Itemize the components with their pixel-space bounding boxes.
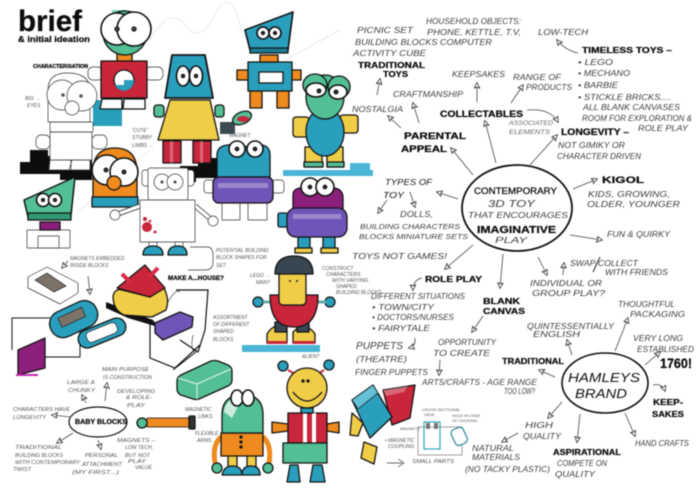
annotation: cute stubby limbs — [132, 128, 153, 149]
mind map: blank canvas: CANVAS — [483, 306, 525, 316]
mind map: timeless toys: ALL BLANK CANVASES — [582, 102, 680, 112]
mind map: blank canvas: ARTS/CRAFTS - AGE RANGE — [421, 377, 537, 387]
mind map: baby blocks: PLAY — [127, 403, 146, 409]
annotation: construct characters: CONSTRUCT — [322, 266, 354, 272]
toy: uncoloured outline character: CHARACTERISATION — [33, 64, 88, 70]
house building block sketch: ASSORTMENT — [212, 315, 249, 321]
mind map: baby blocks: BABY BLOCKS — [75, 417, 127, 426]
mind map: timeless toys: ROLE PLAY — [638, 123, 689, 133]
mind map: blank canvas: BLANK — [483, 296, 521, 306]
mind map: baby blocks: PLAY — [128, 459, 147, 465]
mind map: baby blocks: (MY FIRST...) — [72, 470, 120, 476]
mind map: individual or group play: INDIVIDUAL OR — [530, 278, 602, 288]
title: brief — [18, 5, 83, 38]
annotation: cute stubby limbs: 'CUTE' — [132, 128, 149, 134]
mind map: baby blocks: LONGEVITY — [13, 415, 47, 421]
annotation: lego man: LEGO → — [250, 273, 270, 279]
mind map: role play — [355, 274, 482, 377]
green building block — [177, 360, 232, 400]
magnetic link arm: LINKS — [198, 414, 213, 420]
mind map: types of toy: TOYS NOT GAMES! — [352, 251, 448, 261]
mind map: traditional and household toys: HOUSEHOLD OBJECTS: — [426, 16, 522, 26]
icon: magnet — [220, 108, 254, 139]
toy: orange dome character — [92, 148, 138, 207]
mind map: timeless toys: TIMELESS TOYS – — [582, 45, 672, 55]
mind map: baby blocks: BUT NOT — [125, 453, 151, 459]
mind map: timeless toys: • STICKLE BRICKS.... — [578, 92, 671, 102]
mind map: timeless toys: ROOM FOR EXPLORATION & — [582, 113, 692, 123]
toy: teal and purple robot — [204, 141, 284, 220]
mind map: hamleys brand: ESTABLISHED — [637, 344, 694, 354]
mind map: hamleys brand: (NO TACKY PLASTIC) — [465, 464, 550, 474]
mind map: collectables and parental appeal: ASSOCIATED — [508, 120, 553, 127]
toy: green droopy-eyed character — [293, 74, 358, 167]
mind map: baby blocks: DEVELOPING — [117, 389, 155, 395]
mind map: collectables and parental appeal — [352, 69, 572, 155]
mind map: traditional and household toys: TOYS — [383, 69, 408, 79]
mind map: timeless toys: • MECHANO — [578, 68, 630, 78]
mind map: baby blocks: CHUNKY — [68, 388, 96, 394]
mind map: hamleys brand: HIGH — [525, 420, 554, 430]
magnetic link arm: ARMS → — [196, 438, 218, 444]
mind map: collectables and parental appeal: RANGE OF — [513, 72, 562, 82]
mind map: hamleys brand: 1760! — [660, 355, 692, 371]
mind map: longevity and kigol — [557, 127, 680, 239]
toy: blue head yellow dress robot — [154, 55, 224, 163]
mind map: hamleys brand: ASPIRATIONAL — [553, 447, 621, 457]
mind map: collectables and parental appeal: COLLECTABLES — [440, 109, 523, 119]
mind map: timeless toys — [538, 27, 692, 133]
mind map: traditional and household toys: TRADITIONAL — [358, 60, 425, 70]
annotation: cute stubby limbs: STUBBY — [132, 135, 153, 141]
mind map: hamleys brand: THOUGHTFUL — [618, 299, 675, 309]
mind map: hamleys brand: SAKES — [652, 409, 684, 419]
mind map: baby blocks: BUILDING BLOCKS — [15, 453, 64, 459]
mind map: role play: DIFFERENT SITUATIONS — [371, 291, 465, 301]
mind map: hamleys brand: QUALITY — [555, 469, 596, 479]
house building block sketch: MAKE A...HOUSE? — [168, 275, 224, 282]
mind map: baby blocks: ATTACHMENT — [81, 462, 123, 468]
annotation: construct characters: BUILDING BLOCKS — [336, 290, 382, 296]
annotation: potential building block shapes — [188, 247, 269, 270]
mind map: baby blocks: MAGNETS – — [117, 438, 155, 444]
mind map: collectables and parental appeal: PRODUCTS — [526, 82, 572, 92]
mind map: hamleys brand: KEEP- — [653, 397, 683, 407]
annotation: construct characters: CHARACTERS — [326, 272, 361, 278]
mind map: hamleys brand: TRADITIONAL — [502, 356, 564, 366]
mind map: baby blocks: TRADITIONAL — [15, 445, 62, 451]
mind map: hamleys brand: PACKAGING — [630, 309, 685, 319]
mind map: baby blocks: WITH CONTEMPORARY — [15, 460, 81, 466]
magnetic link arm — [137, 407, 219, 444]
mind map: blank canvas — [421, 296, 537, 396]
diagram: cross-sectional view: VIEW — [424, 412, 435, 417]
background marker swatches — [20, 10, 373, 182]
mind map: baby blocks: LOW TECH, — [125, 445, 153, 451]
mind map: collectables and parental appeal: NOSTALGIA — [352, 104, 403, 114]
mind map: role play: • FAIRYTALE — [372, 323, 430, 333]
mind map: longevity and kigol: KIGOL — [602, 175, 644, 186]
mind map: collectables and parental appeal: ELEMENTS — [509, 129, 551, 136]
mind map: timeless toys: • BARBIE — [578, 80, 618, 90]
mind map: collectables and parental appeal: PARENTAL — [404, 131, 466, 142]
mind map: hamleys brand: ENGLISH — [533, 329, 581, 339]
diagram: cross-sectional view: OF CHOKING — [452, 418, 477, 423]
mind map: timeless toys: • LEGO — [578, 57, 613, 67]
annotation: lego man: MAN? — [256, 280, 270, 286]
mind map: longevity and kigol: NOT GIMIKY OR — [558, 140, 625, 150]
annotation: cute stubby limbs: LIMBS → — [132, 143, 153, 149]
mind map: baby blocks: VALUE — [135, 465, 153, 471]
mind map: role play: ROLE PLAY — [425, 274, 482, 284]
toy: green head red body robot — [88, 11, 163, 109]
mind map: hamleys brand: MATERIALS — [472, 452, 520, 462]
mind map: central concept: 3D TOY — [488, 199, 537, 210]
icon: magnet: MAGNET — [229, 133, 251, 139]
mind map: hamleys brand: VERY LONG — [633, 333, 683, 343]
mind map: types of toy: BUILDING CHARACTERS — [360, 222, 460, 231]
diagram: cross-sectional view: COUPLING — [388, 444, 414, 450]
mind map: hamleys brand: NATURAL — [472, 443, 514, 453]
toy: uncoloured outline character: BIG → — [25, 96, 40, 102]
mind map: traditional and household toys: PHONE, KETTLE, T.V, — [427, 27, 521, 37]
mind map: individual or group play: WITH FRIENDS — [605, 267, 668, 277]
mind map: central concept: THAT ENCOURAGES — [468, 210, 568, 220]
magnetic link arm: FLEXIBLE — [195, 431, 219, 437]
annotation: potential building block shapes: SET. — [216, 263, 227, 269]
mind map: collectables and parental appeal: KEEPSAKES — [452, 69, 505, 79]
mind map: traditional and household toys — [352, 16, 522, 79]
annotation: construct characters: WITH VARYING — [332, 278, 368, 284]
toy: blue and red cubes with magnetic coupling — [350, 385, 415, 464]
mind map: central concept: IMAGINATIVE — [477, 225, 556, 236]
exploded magnet block diagram: MAGNETS EMBEDDED — [70, 256, 125, 262]
toy: white square robot — [110, 168, 218, 255]
mind map: types of toy: BLOCKS MINIATURE SETS — [359, 232, 468, 241]
mind map: baby blocks — [13, 367, 155, 476]
mind map: longevity and kigol: OLDER, YOUNGER — [587, 199, 680, 209]
house building block sketch: BLOCKS — [213, 337, 234, 343]
mind map: longevity and kigol: LONGEVITY – — [561, 127, 629, 138]
mind map: blank canvas: TO CREATE — [433, 348, 490, 358]
mind map: hamleys brand: QUINTESSENTIALLY — [527, 321, 615, 331]
mind map: baby blocks: MAIN PURPOSE — [102, 367, 150, 373]
mind map: timeless toys: LOW-TECH — [538, 27, 589, 37]
mind map: collectables and parental appeal: CRAFTMANSHIP — [393, 89, 463, 99]
mind map: central concept: PLAY — [495, 235, 529, 245]
mind map: hamleys brand — [465, 299, 694, 479]
annotation: potential building block shapes: POTENTIAL BUILDING — [216, 248, 269, 254]
toy: uncoloured outline character: EYES — [27, 103, 41, 109]
mind map: types of toy: TOY — [383, 190, 406, 200]
mind map: hamleys brand: HAND CRAFTS — [635, 438, 689, 448]
house building block sketch: OF DIFFERENT — [213, 322, 250, 328]
toy: alien robot — [272, 354, 339, 482]
toy: green wedge head robot — [24, 177, 75, 248]
mind map: role play: • DOCTORS/NURSES — [372, 312, 454, 322]
toy: lego man — [242, 256, 335, 352]
diagram: cross-sectional view — [385, 407, 480, 467]
annotation: lego man — [250, 273, 270, 286]
mind map: role play: (THEATRE) — [356, 354, 407, 364]
mind map: blank canvas: TOO LOW? — [504, 386, 535, 396]
mind map: longevity and kigol: FUN & QUIRKY — [607, 229, 671, 239]
mind map: baby blocks: CHARACTERS HAVE — [13, 407, 71, 413]
mind map: baby blocks: PERSONAL — [85, 453, 118, 459]
mind map: blank canvas: OPPORTUNITY — [438, 337, 497, 347]
exploded magnet block diagram: INSIDE BLOCKS — [70, 263, 109, 269]
magnetic link arm: MAGNETIC — [185, 407, 212, 413]
diagram: cross-sectional view: SMALL PARTS — [412, 459, 455, 465]
mind map: individual or group play: GROUP PLAY? — [532, 288, 605, 298]
mind map: individual or group play — [530, 258, 668, 298]
toy: alien robot: ALIEN? — [301, 354, 319, 360]
toy: uncoloured outline character — [25, 64, 107, 170]
annotation: construct characters: SHAPED — [336, 284, 357, 290]
mind map: hamleys brand: HAMLEYS — [568, 370, 640, 385]
mind map: longevity and kigol: KIDS, GROWING, — [588, 189, 670, 199]
mind map: role play: • TOWN/CITY — [372, 302, 436, 312]
mind map: longevity and kigol: CHARACTER DRIVEN — [557, 151, 642, 161]
mind map: arrows from central concept — [377, 40, 602, 375]
house building block sketch: SHAPED — [213, 329, 234, 335]
toy: green frog robot with orange body — [212, 390, 273, 475]
mind map: central concept — [462, 165, 572, 251]
mind map: traditional and household toys: ACTIVITY CUBE — [352, 48, 426, 58]
diagram: cross-sectional view: CROSS-SECTIONAL — [422, 407, 460, 412]
exploded magnet block diagram — [12, 256, 129, 376]
annotation: potential building block shapes: BLOCK SHAPES FOR — [216, 255, 267, 261]
mind map: traditional and household toys: PICNIC SET — [357, 25, 414, 35]
annotation: construct characters — [322, 266, 382, 296]
mind map: role play: PUPPETS — [356, 341, 403, 352]
mind map: hamleys brand: QUALITY — [523, 431, 562, 441]
title: & initial ideation — [18, 35, 90, 44]
mind map: central concept: CONTEMPORARY — [474, 186, 557, 196]
toy: magenta and purple robot — [278, 178, 347, 253]
mind map: individual or group play: SWAP/COLLECT — [570, 258, 639, 268]
mind map: types of toy: DOLLS, — [400, 209, 433, 219]
diagram: cross-sectional view: MAGNETS — [400, 426, 420, 431]
mind map: baby blocks: & ROLE- — [126, 395, 152, 401]
diagram: cross-sectional view: • MAGNETIC — [385, 438, 415, 444]
mind map: baby blocks: LARGE & — [67, 380, 96, 386]
mind map: hamleys brand: BRAND — [575, 386, 627, 401]
mind map: collectables and parental appeal: APPEAL — [401, 144, 447, 155]
mind map: traditional and household toys: BUILDING BLOCKS COMPUTER — [355, 37, 492, 47]
toy: teal angular head robot — [237, 12, 301, 108]
mind map: types of toy — [352, 177, 468, 261]
mind map: types of toy: TYPES OF — [385, 177, 433, 187]
mind map: baby blocks: IS CONSTRUCTION — [103, 375, 152, 381]
mind map: baby blocks: TWIST — [13, 467, 32, 473]
diagram: cross-sectional view: HOLE IN CASE — [452, 413, 480, 418]
mind map: hamleys brand: COMPETE ON — [557, 458, 608, 468]
mind map: role play: FINGER PUPPETS — [355, 367, 428, 377]
house building block sketch — [106, 265, 250, 370]
